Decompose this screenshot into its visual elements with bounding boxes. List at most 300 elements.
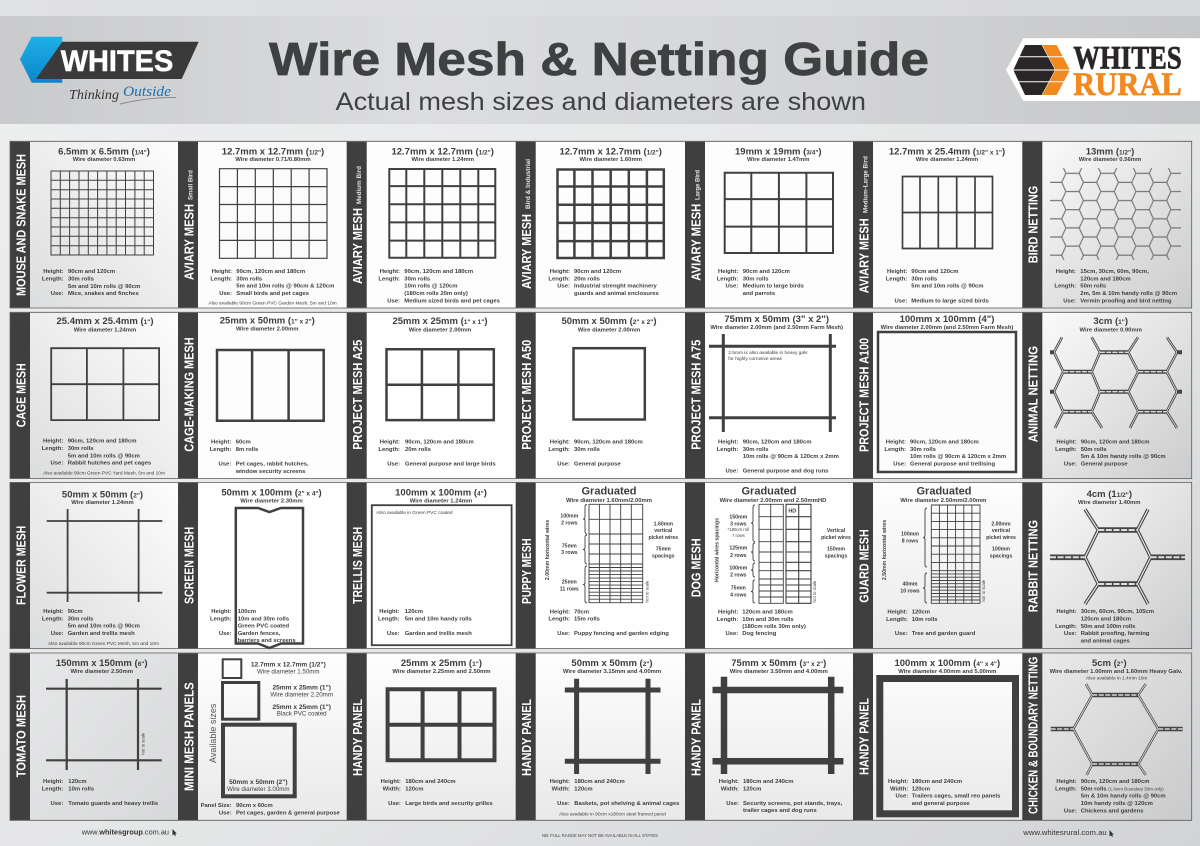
panel: guard mesh: 10m rolls <box>912 617 938 623</box>
panel: bird netting: Vermin proofing and bird netting <box>1080 298 1172 304</box>
panel: bird netting <box>1022 142 1192 308</box>
panel: guard mesh: 10 rows <box>900 589 920 595</box>
panel: cage mesh: 25.4mm x 25.4mm (1") <box>56 316 154 327</box>
panel: aviary mesh small bird: Use: <box>219 291 232 297</box>
panel: mini mesh panels: 50mm x 50mm (2") <box>229 779 288 786</box>
panel: aviary mesh small bird: Length: <box>210 276 232 282</box>
panel: project mesh A100: Wire diameter 2.00mm (and 2.50mm Farm Mesh) <box>881 325 1013 331</box>
panel: rabbit netting: 50m and 100m rolls <box>1081 624 1136 630</box>
logo: Whites: Thinking <box>69 88 119 103</box>
panel: aviary mesh medium-large bird <box>853 142 1022 308</box>
panel: rabbit netting: 4cm (11/2") <box>1087 489 1132 500</box>
panel: guard mesh: vertical <box>992 528 1011 534</box>
panel: project mesh A50: 50mm x 50mm (2" x 2") <box>561 316 657 327</box>
panel: chicken and boundary netting: Height: <box>1056 779 1077 785</box>
panel: handy panel 75mm <box>685 653 853 820</box>
panel: puppy mesh: 75mm <box>562 544 577 550</box>
panel: dog mesh: 75mm <box>731 586 746 592</box>
panel: bird netting: 15cm, 30cm, 60m, 90cm, <box>1080 269 1149 275</box>
panel: aviary mesh medium bird: Wire diameter 1.24mm <box>411 157 474 163</box>
panel: project mesh A25: Use: <box>387 461 400 467</box>
panel: mini mesh panels: Available sizes <box>208 703 218 763</box>
panel: screen mesh: Garden fences, <box>238 631 281 637</box>
panel: tomato mesh: Height: <box>43 779 63 785</box>
panel: aviary mesh large bird: 90cm and 120cm <box>743 269 790 275</box>
panel: cage-making mesh: 25mm x 50mm (1" x 2") <box>220 316 315 326</box>
panel: puppy mesh: Not to scale <box>644 580 650 603</box>
panel: chicken and boundary netting: 5m & 10m handy rolls @ 90cm <box>1081 794 1166 800</box>
panel: project mesh A50: 30m rolls <box>574 447 601 453</box>
panel frames <box>10 141 1192 820</box>
panel: cage mesh: Length: <box>42 446 63 452</box>
panel: aviary mesh medium bird: 10m rolls @ 120cm <box>404 284 458 290</box>
panel: aviary mesh small bird: AVIARY MESH <box>182 204 196 280</box>
panel: project mesh A75: 75mm x 50mm (3" x 2") <box>724 314 829 325</box>
panel: chicken and boundary netting: 5cm (2") <box>1092 658 1127 669</box>
panel: puppy mesh: 25mm <box>562 579 577 585</box>
panel: mini mesh panels: Panel Size: <box>201 803 232 809</box>
panel: aviary mesh medium-large bird: 5m and 10m rolls @ 90cm <box>911 284 984 290</box>
panel: screen mesh: Green PVC coated <box>238 624 289 630</box>
panel: project mesh A75: Use: <box>726 469 738 475</box>
panel: puppy mesh: 75mm <box>656 546 671 552</box>
panel: trellis mesh: 120cm <box>405 609 423 615</box>
panel: aviary mesh medium bird <box>347 142 516 308</box>
panel: handy panel 100mm: 120cm <box>912 786 930 792</box>
panel: flower mesh: 50mm x 50mm (2") <box>62 489 143 500</box>
panel: cage mesh: Also available 90cm Green PVC Yard Mesh, 5m and 10m <box>43 471 165 477</box>
panel: aviary mesh bird and industrial: AVIARY MESH <box>520 214 534 289</box>
panel: screen mesh: Use: <box>219 631 232 637</box>
panel: handy panel 50mm: Use: <box>557 801 570 807</box>
panel: aviary mesh medium bird: 12.7mm x 12.7mm (1/2") <box>391 146 494 158</box>
panel: aviary mesh medium bird: Length: <box>378 276 400 282</box>
panel: guard mesh: picket wires <box>986 535 1016 541</box>
panel: project mesh A75: Length: <box>717 447 738 453</box>
panel: mouse and snake mesh: Wire diameter 0.63mm <box>73 157 135 163</box>
panel: cage-making mesh: Wire diameter 2.00mm <box>236 327 299 333</box>
panel: aviary mesh medium bird: Medium sized birds and pet cages <box>404 298 501 304</box>
panel: handy panel 75mm: 120cm <box>743 786 761 792</box>
panel: mouse and snake mesh: 30m rolls <box>68 276 95 282</box>
panel: mouse and snake mesh: Height: <box>43 269 64 275</box>
panel: guard mesh: Height: <box>887 610 908 616</box>
panel: aviary mesh medium bird: Height: <box>380 269 400 275</box>
panel: handy panel 75mm: trailer cages and dog runs <box>743 808 817 814</box>
panel: tomato mesh: Tomato guards and heavy trellis <box>68 801 159 807</box>
panel: project mesh A25: Wire diameter 2.00mm <box>409 328 471 334</box>
panel: dog mesh: Dog fencing <box>742 631 777 637</box>
panel: chicken and boundary netting: Use: <box>1064 808 1077 814</box>
panel: mouse and snake mesh: Length: <box>42 276 64 282</box>
panel: bird netting: Wire diameter 0.56mm <box>1079 157 1141 163</box>
panel: bird netting: Height: <box>1056 269 1076 275</box>
panel: mini mesh panels: 12.7mm x 12.7mm (1/2") <box>251 661 326 668</box>
panel: project mesh A100: Height: <box>886 440 906 446</box>
panel: cage mesh: CAGE MESH <box>15 363 29 427</box>
panel: dog mesh: 3 rows <box>730 522 747 528</box>
panel: puppy mesh: Height: <box>550 610 570 616</box>
panel: handy panel 100mm: Trailers cages, small reo panels <box>912 794 1001 800</box>
panel: rabbit netting: Use: <box>1064 631 1077 637</box>
panel: aviary mesh bird and industrial: 12.7mm x 12.7mm (1/2") <box>559 146 662 158</box>
panel: project mesh A100: 90cm, 120cm and 180cm <box>910 440 979 446</box>
panel: aviary mesh small bird: Small birds and pet cages <box>236 291 310 297</box>
panel: handy panel 100mm: HANDY PANEL <box>857 698 871 775</box>
panel: chicken and boundary netting: 10m handy rolls @ 120cm <box>1081 801 1153 807</box>
panel: puppy mesh: 2 rows <box>561 520 578 526</box>
panel: trellis mesh <box>347 483 516 648</box>
footer: whitesrural url: www.whitesrural.com.au <box>1022 828 1107 837</box>
panel: chicken and boundary netting: Wire diameter 1.00mm and 1.60mm Heavy Galv. <box>1050 669 1183 675</box>
panel: screen mesh: barriers and screens <box>238 638 296 644</box>
panel: mouse and snake mesh: 5m and 10m rolls @ 90cm <box>68 284 140 290</box>
panel: rabbit netting: and animal cages <box>1081 638 1131 644</box>
panel: dog mesh: 125mm <box>729 546 748 552</box>
panel: dog mesh: Graduated <box>741 486 797 498</box>
panel: trellis mesh: TRELLIS MESH <box>351 527 365 604</box>
panel: mouse and snake mesh: 6.5mm x 6.5mm (1/4") <box>58 146 150 158</box>
panel: aviary mesh medium-large bird: Wire diameter 1.24mm <box>916 157 978 163</box>
panel: project mesh A100: 10m rolls @ 90cm & 120cm x 2mm <box>910 454 1006 460</box>
panel: chicken and boundary netting <box>1022 653 1192 820</box>
panel: aviary mesh small bird: 5m and 10m rolls @ 90cm & 120cm <box>236 284 334 290</box>
panel: puppy mesh: 100mm <box>560 514 579 520</box>
panel: mini mesh panels: 25mm x 25mm (1") <box>272 684 331 692</box>
panel: screen mesh: 10m and 30m rolls <box>238 616 290 622</box>
panel: aviary mesh medium bird: Use: <box>387 298 400 304</box>
panel: dog mesh: 100mm <box>729 566 748 572</box>
panel: dog mesh: Wire diameter 2.00mm and 2.50mmHD <box>720 498 826 504</box>
panel: aviary mesh medium-large bird: Height: <box>887 269 907 275</box>
panel: cage mesh: Rabbit hutches and pet cages <box>68 461 152 467</box>
panel: handy panel 25mm: 25mm x 25mm (1") <box>401 658 482 669</box>
panel: dog mesh: *180cm roll <box>728 527 749 532</box>
panel: handy panel 50mm: 180cm and 240cm <box>574 779 625 785</box>
panel: cage-making mesh: window security screens <box>235 469 306 475</box>
panel: project mesh A50 <box>516 313 685 478</box>
panel: flower mesh: Length: <box>42 616 64 622</box>
panel: project mesh A50: Height: <box>550 440 570 446</box>
panel: trellis mesh: Also available in Green PVC coated <box>376 510 453 516</box>
panel: aviary mesh medium bird: (180cm rolls 20m only) <box>404 291 468 297</box>
panel: aviary mesh bird and industrial: 90cm and 120cm <box>574 269 621 275</box>
panel: project mesh A75: PROJECT MESH A75 <box>689 340 703 450</box>
panel: guard mesh: 100mm <box>901 531 919 537</box>
panel: project mesh A100: Use: <box>893 461 906 467</box>
panel: guard mesh: GUARD MESH <box>857 529 871 603</box>
panel: puppy mesh: 11 rows <box>560 586 579 592</box>
panel: aviary mesh medium bird: AVIARY MESH <box>351 208 365 284</box>
panel: chicken and boundary netting: Chickens and gardens <box>1081 808 1144 814</box>
panel: aviary mesh bird and industrial: Industrial strenght machinery <box>574 284 658 290</box>
panel: puppy mesh: 2.00mm horizontal wires <box>545 520 551 580</box>
panel: animal netting: 5m & 10m handy rolls @ 90cm <box>1081 454 1166 460</box>
panel: project mesh A25: 90cm, 120cm and 180cm <box>405 440 474 446</box>
panel: screen mesh: Length: <box>210 616 232 622</box>
panel: aviary mesh large bird: Length: <box>717 276 738 282</box>
panel: handy panel 75mm: Height: <box>719 779 739 785</box>
panel: handy panel 50mm: Wire diameter 3.15mm and 4.00mm <box>563 669 661 675</box>
panel: dog mesh: DOG MESH <box>689 538 703 597</box>
panel: handy panel 100mm: Wire diameter 4.00mm and 5.00mm <box>898 669 996 675</box>
panel: mini mesh panels: Black PVC coated <box>277 710 327 718</box>
panel: tomato mesh: TOMATO MESH <box>15 695 29 777</box>
panel: aviary mesh medium-large bird: 12.7mm x 25.4mm (1/2" x 1") <box>889 146 1005 158</box>
panel: puppy mesh: 3 rows <box>561 550 578 556</box>
panel: aviary mesh medium-large bird: Medium to large sized birds <box>911 298 990 304</box>
panel: aviary mesh large bird: AVIARY MESH <box>689 204 703 281</box>
panel: project mesh A25: General purpose and large birds <box>405 461 496 467</box>
panel: handy panel 75mm: Width: <box>721 786 739 792</box>
panel: aviary mesh large bird: Medium to large birds <box>743 284 805 290</box>
footer: whitesgroup url: www.whitesgroup.com.au <box>81 827 169 836</box>
panel: puppy mesh: Wire diameter 1.60mm/2.00mm <box>566 498 652 504</box>
panel: cage-making mesh: Pet cages, rabbit hutches, <box>236 461 309 467</box>
panel: project mesh A75: Wire diameter 2.00mm (and 2.50mm Farm Mesh) <box>710 325 843 331</box>
panel: dog mesh: 10m and 30m rolls <box>742 617 794 623</box>
panel: handy panel 50mm: HANDY PANEL <box>520 699 534 776</box>
panel: aviary mesh bird and industrial: Bird & Industrial <box>526 159 532 209</box>
panel: flower mesh: 90cm <box>68 609 83 615</box>
panel: rabbit netting: Length: <box>1055 624 1077 630</box>
panel: guard mesh <box>853 483 1022 648</box>
panel: project mesh A100: PROJECT MESH A100 <box>857 338 871 452</box>
panel: guard mesh: 8 rows <box>902 538 918 544</box>
panel: cage mesh: Wire diameter 1.24mm <box>74 328 136 334</box>
panel: screen mesh <box>178 483 347 648</box>
panel: handy panel 100mm: 100mm x 100mm (4" x 4") <box>894 658 1000 669</box>
panel: dog mesh: Height: <box>718 610 738 616</box>
panel: tomato mesh: Not to scale <box>140 732 146 755</box>
panel: cage-making mesh <box>178 313 347 478</box>
panel: cage mesh: 30m rolls <box>68 446 94 452</box>
panel: handy panel 50mm: 120cm <box>574 786 593 792</box>
panel: mouse and snake mesh: Use: <box>51 291 64 297</box>
panel: handy panel 100mm <box>853 653 1022 820</box>
panel: project mesh A100: Length: <box>884 447 906 453</box>
panel: chicken and boundary netting: 90cm, 120cm and 180cm <box>1081 779 1149 785</box>
panel: guard mesh: spacings <box>990 554 1012 560</box>
panel: dog mesh: picket wires <box>821 535 851 541</box>
top strip <box>0 0 1200 16</box>
panel: project mesh A25: 25mm x 25mm (1" x 1") <box>392 316 488 327</box>
panel: aviary mesh medium-large bird: Use: <box>895 298 907 304</box>
panel: handy panel 25mm: 180cm and 240cm <box>405 779 456 785</box>
panel: aviary mesh bird and industrial <box>516 142 685 308</box>
panel: aviary mesh small bird: 30m rolls <box>236 276 263 282</box>
panel: dog mesh: 7 rows <box>732 533 745 538</box>
panel: rabbit netting: 30cm, 60cm, 90cm, 105cm <box>1081 609 1154 615</box>
panel: aviary mesh bird and industrial: Height: <box>550 269 570 275</box>
panel: handy panel 25mm: Width: <box>383 786 401 792</box>
panel: cage-making mesh: Use: <box>219 461 231 467</box>
panel: trellis mesh: 5m and 10m handy rolls <box>405 616 473 622</box>
panel: animal netting: 50m rolls <box>1081 447 1107 453</box>
panel: handy panel 25mm: Use: <box>388 801 401 807</box>
panel: aviary mesh bird and industrial: guards and animal enclosures <box>574 291 660 297</box>
panel: project mesh A75 <box>685 313 853 478</box>
panel: screen mesh: 50mm x 100mm (2" x 4") <box>221 488 322 498</box>
panel: flower mesh: Height: <box>43 609 64 615</box>
panel: animal netting: General purpose <box>1081 462 1128 468</box>
panel: tomato mesh <box>10 653 178 820</box>
panel: project mesh A75: for highly corrosive areas <box>728 356 782 362</box>
panel: rabbit netting: Rabbit proofing, farming <box>1081 631 1150 637</box>
panel: project mesh A75: Height: <box>718 440 738 446</box>
panel: handy panel 100mm: and general purpose <box>912 801 970 807</box>
panel: guard mesh: Use: <box>895 631 908 637</box>
panel: dog mesh: Length: <box>717 617 738 623</box>
panel: project mesh A25: PROJECT MESH A25 <box>351 340 365 450</box>
logo: Whites <box>20 37 199 104</box>
panel: rabbit netting <box>1022 483 1192 648</box>
panel: trellis mesh: Use: <box>387 631 400 637</box>
panel: aviary mesh small bird: Small Bird <box>188 170 194 200</box>
panel: tomato mesh: Length: <box>42 786 63 792</box>
logo: Whites Rural <box>1006 38 1200 103</box>
panel: guard mesh: Not to scale <box>981 579 986 602</box>
panel: mini mesh panels: MINI MESH PANELS <box>182 682 196 791</box>
panel: guard mesh: 2.50mm horizontal wires <box>882 520 888 580</box>
panel: aviary mesh medium-large bird: 90cm and 120cm <box>911 269 958 275</box>
panel: mouse and snake mesh: 90cm and 120cm <box>68 269 115 275</box>
panel: aviary mesh large bird: Large Bird <box>695 170 701 200</box>
panel: trellis mesh: Garden and trellis mesh <box>405 631 472 637</box>
panel: aviary mesh large bird: Use: <box>726 284 738 290</box>
panel: chicken and boundary netting: 50m rolls (1.6mm Boundary 50m only) <box>1081 786 1164 792</box>
panel: rabbit netting: Height: <box>1056 609 1077 615</box>
panel: mini mesh panels: Wire diameter 3.00mm <box>227 786 290 793</box>
panel: aviary mesh small bird: Wire diameter 0.71/0.80mm <box>235 157 311 163</box>
panel: mini mesh panels: Pet cages, garden & general purpose <box>236 810 340 816</box>
panel: aviary mesh medium-large bird: Medium-Large Bird <box>863 156 869 213</box>
panel: animal netting <box>1022 313 1192 478</box>
panel: cage mesh: Height: <box>43 439 63 445</box>
panel: handy panel 25mm: Wire diameter 2.25mm and 2.50mm <box>392 669 490 675</box>
panel: handy panel 100mm: Width: <box>890 786 908 792</box>
panel: puppy mesh: picket wires <box>648 535 678 541</box>
panel: dog mesh: Vertical <box>827 528 846 534</box>
panel: puppy mesh <box>516 483 685 648</box>
panel: mouse and snake mesh <box>10 142 178 308</box>
panel: handy panel 25mm: HANDY PANEL <box>351 699 365 776</box>
panel: flower mesh: Wire diameter 1.24mm <box>71 500 134 506</box>
panel: dog mesh: 2 rows <box>730 553 747 559</box>
panel: tomato mesh: 150mm x 150mm (6") <box>56 658 148 669</box>
panel: aviary mesh bird and industrial: Use: <box>557 284 570 290</box>
panel: flower mesh: Garden and trellis mesh <box>68 631 135 637</box>
panel: animal netting: Height: <box>1056 440 1077 446</box>
panel: handy panel 75mm: 75mm x 50mm (3" x 2") <box>731 658 826 669</box>
panel: rabbit netting: 120cm and 180cm <box>1081 616 1131 622</box>
panel: aviary mesh large bird <box>685 142 853 308</box>
panel: handy panel 50mm: Also available in 90cm x180cm steel framed panel <box>559 812 666 818</box>
panel: tomato mesh: Use: <box>51 801 63 807</box>
panel: aviary mesh medium bird: 90cm, 120cm and 180cm <box>404 269 473 275</box>
panel: aviary mesh large bird: Height: <box>718 269 738 275</box>
panel: aviary mesh large bird: 19mm x 19mm (3/4") <box>735 146 822 158</box>
panel: cage-making mesh: CAGE-MAKING MESH <box>182 337 196 452</box>
panel: animal netting: ANIMAL NETTING <box>1027 346 1041 442</box>
panel: chicken and boundary netting: Also available in 1.4mm 10m <box>1086 676 1147 682</box>
panel: aviary mesh large bird: 30m rolls <box>743 276 769 282</box>
panel: project mesh A75: 10m rolls @ 90cm & 120cm x 2mm <box>743 454 839 460</box>
panel: puppy mesh: vertical <box>654 528 673 534</box>
panel: project mesh A100: 30m rolls <box>910 447 937 453</box>
panel: puppy mesh: 15m rolls <box>574 616 601 622</box>
panel: handy panel 50mm: 50mm x 50mm (2") <box>571 658 653 669</box>
panel: mini mesh panels: 25mm x 25mm (1") <box>272 704 331 711</box>
title: Wire Mesh & Netting Guide <box>269 33 929 85</box>
panel: guard mesh: Tree and garden guard <box>912 631 976 637</box>
panel: aviary mesh medium-large bird: 30m rolls <box>911 276 938 282</box>
logo: Whites: Outside <box>123 84 171 100</box>
panel: mini mesh panels: Use: <box>219 810 232 816</box>
panel: handy panel 25mm: Height: <box>381 779 401 785</box>
panel: project mesh A75: 90cm, 120cm and 180cm <box>743 440 811 446</box>
panel: project mesh A100 <box>853 313 1022 478</box>
panel: project mesh A25 <box>347 313 516 478</box>
panel: chicken and boundary netting: Length: <box>1055 786 1077 792</box>
panel: mini mesh panels: Wire diameter 2.20mm <box>270 691 333 698</box>
panel: handy panel 75mm: Wire diameter 3.50mm and 4.00mm <box>730 669 828 675</box>
panel: handy panel 100mm: 180cm and 240cm <box>912 779 962 785</box>
panel: project mesh A25: Length: <box>378 447 400 453</box>
panel: screen mesh: Wire diameter 2.30mm <box>240 498 303 504</box>
panel: mini mesh panels: Wire diameter 1.50mm <box>257 668 320 675</box>
panel: handy panel 50mm: Width: <box>552 786 570 792</box>
panel: project mesh A50: General purpose <box>574 461 622 467</box>
panel: dog mesh: 150mm <box>827 546 845 552</box>
panel: dog mesh: spacings <box>825 554 847 560</box>
panel: puppy mesh: 70cm <box>574 610 589 616</box>
panel: project mesh A100: 100mm x 100mm (4") <box>900 314 994 325</box>
panel: screen mesh: 100cm <box>238 609 256 615</box>
panel: bird netting: BIRD NETTING <box>1027 186 1041 263</box>
panel: aviary mesh medium-large bird: AVIARY MESH <box>857 218 871 293</box>
panel: rabbit netting: RABBIT NETTING <box>1027 520 1041 612</box>
panel: bird netting: 50m rolls <box>1080 284 1107 290</box>
panel: bird netting: 13mm (1/2") <box>1086 146 1134 158</box>
panel: tomato mesh: Wire diameter 2.50mm <box>70 669 133 675</box>
panel: animal netting: Length: <box>1055 447 1077 453</box>
panel: project mesh A75: General purpose and dog runs <box>743 469 829 475</box>
panel: aviary mesh small bird: Also available 90cm Green PVC Garden Mesh, 5m and 10m <box>208 300 337 306</box>
panel: animal netting: 3cm (1") <box>1093 316 1128 327</box>
panel: flower mesh <box>10 483 178 648</box>
panel: guard mesh: 100mm <box>992 546 1010 552</box>
panel: screen mesh: Height: <box>211 609 232 615</box>
panel: cage-making mesh: Length: <box>210 447 231 453</box>
panel: trellis mesh: Height: <box>379 609 400 615</box>
panel: guard mesh: Wire diameter 2.50mm/2.00mm <box>900 498 986 504</box>
panel: cage mesh: Use: <box>51 461 63 467</box>
panel: project mesh A50: Length: <box>548 447 570 453</box>
panel: handy panel 75mm: 180cm and 240cm <box>743 779 793 785</box>
panel: dog mesh: HD <box>788 508 796 514</box>
panel: puppy mesh: Puppy fencing and garden edging <box>574 631 669 637</box>
panel: handy panel 25mm <box>347 653 516 820</box>
panel: tomato mesh: 120cm <box>68 779 87 785</box>
panel: puppy mesh: spacings <box>652 554 675 560</box>
panel: puppy mesh: Length: <box>548 616 570 622</box>
panel: aviary mesh small bird <box>178 142 347 308</box>
panel: project mesh A75: 30m rolls <box>743 447 769 453</box>
panel: cage-making mesh: 8m rolls <box>236 447 259 453</box>
panel: tomato mesh: 10m rolls <box>68 786 95 792</box>
panel: puppy mesh: Graduated <box>581 486 637 498</box>
